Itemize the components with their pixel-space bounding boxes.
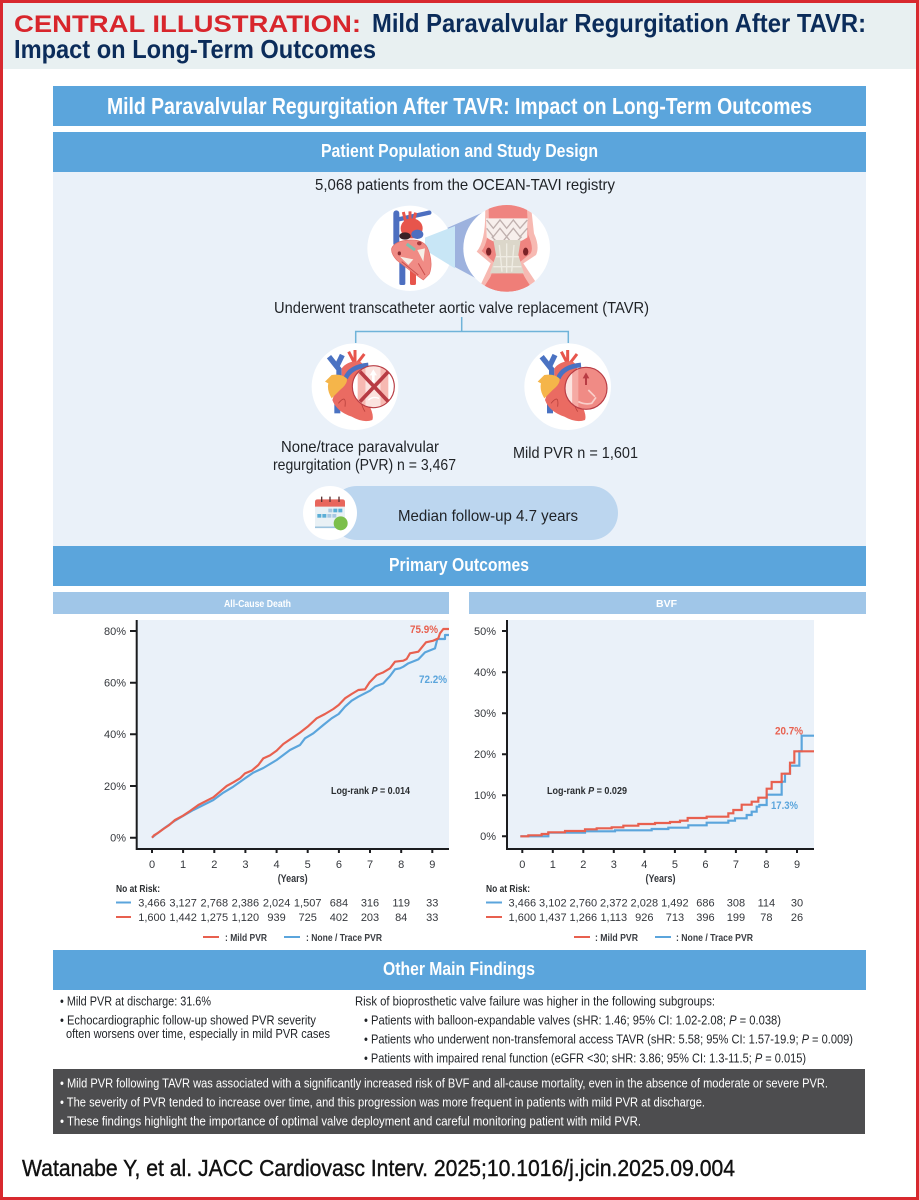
- table: number at risk: 1,437: [539, 912, 567, 924]
- end label: mild PVR: 20.7%: [775, 726, 803, 738]
- table: number at risk: 33: [426, 898, 438, 910]
- legend: [574, 932, 753, 944]
- text block: left findings: • Echocardiographic follow-up showed PVR severity: [60, 1012, 316, 1028]
- table: number at risk: 119: [392, 898, 410, 910]
- text block: right findings: • Patients who underwent non-transfemoral access TAVR (sHR: 5.58; 95% CI: 1.57-19.9; P = 0.009): [364, 1032, 853, 1046]
- end label: none/trace PVR: 72.2%: [419, 674, 447, 686]
- table: number at risk: 1,600: [138, 912, 166, 924]
- x axis labels: 1: [180, 859, 186, 871]
- heading bar: main title: [53, 86, 866, 126]
- heading bar: patient population: [53, 132, 866, 172]
- legend: : Mild PVR: [225, 932, 267, 944]
- heading bar: primary outcomes: [53, 546, 866, 586]
- table: number at risk: 84: [395, 912, 407, 924]
- panel: conclusions: [53, 1069, 865, 1134]
- legend: : None / Trace PVR: [676, 932, 753, 944]
- x axis labels: 6: [336, 859, 342, 871]
- table: number at risk: 2,024: [263, 898, 290, 910]
- x axis labels: 9: [429, 859, 435, 871]
- x axis labels: 2: [211, 859, 217, 871]
- table: number at risk: 3,127: [169, 898, 197, 910]
- x axis labels: 9: [794, 859, 800, 871]
- text block: right findings: • Patients with impaired renal function (eGFR <30; sHR: 3.86; 95% CI: 1.3-11.5; P = 0.015): [364, 1050, 806, 1066]
- citation: Watanabe Y, et al. JACC Cardiovasc Interv. 2025;10.1016/j.jcin.2025.09.004: [22, 1155, 735, 1181]
- table: number at risk: 1,275: [201, 912, 228, 924]
- table: number at risk: 926: [635, 912, 653, 924]
- panel: patient population and study design: [53, 132, 866, 546]
- panel: all-cause death chart: [53, 592, 449, 944]
- table: number at risk: 939: [267, 912, 286, 924]
- sub-heading: BVF: BVF: [656, 598, 678, 610]
- x axis labels: 5: [305, 859, 311, 871]
- table: number at risk: 1,507: [294, 898, 321, 910]
- table: number at risk: No at Risk:: [486, 883, 530, 895]
- text: none/trace PVR group: [273, 439, 456, 474]
- text block: left findings: often worsens over time, especially in mild PVR cases: [66, 1026, 330, 1041]
- x axis labels: 8: [763, 859, 769, 871]
- x axis labels: 2: [580, 859, 586, 871]
- y axis labels: 30%: [474, 708, 496, 720]
- x axis labels: 4: [641, 859, 647, 871]
- x axis labels: 0: [149, 859, 155, 871]
- y axis labels: 20%: [104, 781, 126, 793]
- table: number at risk: 3,102: [539, 898, 567, 910]
- header band: [2, 3, 917, 69]
- heading bar: patient population: Patient Population and Study Design: [321, 141, 598, 161]
- x axis labels: [149, 859, 435, 885]
- sub-heading: all-cause death: [53, 592, 449, 614]
- table: number at risk: 316: [361, 898, 379, 910]
- table: number at risk: 1,113: [600, 912, 627, 924]
- legend: : Mild PVR: [595, 932, 638, 944]
- y axis labels: 80%: [104, 626, 126, 638]
- legend: [203, 932, 382, 944]
- text: none/trace PVR group: regurgitation (PVR) n = 3,467: [273, 457, 456, 474]
- table: number at risk: 1,120: [232, 912, 259, 924]
- table: number at risk: No at Risk:: [116, 883, 160, 895]
- table: number at risk: 3,466: [138, 898, 166, 910]
- y axis labels: 10%: [474, 790, 496, 802]
- table: number at risk: 114: [758, 898, 775, 910]
- heading bar: primary outcomes: Primary Outcomes: [389, 555, 529, 575]
- table: number at risk: [116, 883, 438, 924]
- table: number at risk: 713: [666, 912, 684, 924]
- y axis labels: [474, 626, 496, 843]
- x axis labels: 7: [733, 859, 739, 871]
- x axis labels: (Years): [646, 873, 676, 885]
- table: number at risk: 30: [791, 898, 803, 910]
- table: number at risk: 199: [727, 912, 745, 924]
- y axis labels: 0%: [480, 831, 496, 843]
- x axis labels: (Years): [278, 873, 308, 885]
- y axis labels: 60%: [104, 678, 126, 690]
- callout: median follow-up: [303, 486, 618, 540]
- table: number at risk: 2,386: [232, 898, 259, 910]
- x axis labels: 4: [274, 859, 280, 871]
- icon: heart with magnified TAVR valve: [367, 203, 550, 293]
- table: number at risk: 2,028: [631, 898, 658, 910]
- y axis labels: [104, 626, 126, 844]
- text: mild PVR group: Mild PVR n = 1,601: [513, 445, 638, 462]
- table: number at risk: 2,768: [201, 898, 228, 910]
- text: follow-up: Median follow-up 4.7 years: [398, 508, 578, 525]
- table: number at risk: 684: [330, 898, 348, 910]
- table: number at risk: 33: [426, 912, 438, 924]
- x axis labels: 5: [672, 859, 678, 871]
- y axis labels: 0%: [110, 832, 126, 844]
- title: first line: Mild Paravalvular Regurgitation After TAVR:: [372, 8, 866, 38]
- x axis labels: 3: [611, 859, 617, 871]
- y axis labels: 40%: [474, 667, 496, 679]
- y axis labels: 20%: [474, 749, 496, 761]
- table: number at risk: [486, 883, 803, 924]
- table: number at risk: 1,492: [661, 898, 689, 910]
- x axis labels: 8: [398, 859, 404, 871]
- y axis labels: 50%: [474, 626, 496, 638]
- table: number at risk: 1,442: [169, 912, 197, 924]
- table: number at risk: 396: [696, 912, 715, 924]
- x axis labels: 3: [242, 859, 248, 871]
- line chart: BVF curves: [502, 620, 814, 853]
- table: number at risk: 402: [330, 912, 348, 924]
- table: number at risk: 308: [727, 898, 745, 910]
- y axis labels: 40%: [104, 729, 126, 741]
- x axis labels: 0: [519, 859, 525, 871]
- x axis labels: 6: [702, 859, 708, 871]
- table: number at risk: 725: [299, 912, 317, 924]
- end label: mild PVR: 75.9%: [410, 624, 438, 636]
- legend: : None / Trace PVR: [306, 932, 382, 944]
- text block: left findings: [60, 994, 330, 1041]
- table: number at risk: 78: [760, 912, 773, 924]
- text block: left findings: • Mild PVR at discharge: 31.6%: [60, 994, 211, 1008]
- text: patient count: 5,068 patients from the OCEAN-TAVI registry: [315, 177, 615, 194]
- heading bar: main title: Mild Paravalvular Regurgitation After TAVR: Impact on Long-Term Outcomes: [107, 93, 812, 119]
- panel: conclusions: • These findings highlight the importance of optimal valve deployment and careful monitoring patient with mild PVR.: [60, 1114, 641, 1128]
- panel: BVF chart: [469, 592, 866, 944]
- end label: none/trace PVR: 17.3%: [771, 800, 798, 812]
- panel: conclusions: • The severity of PVR tended to increase over time, and this progression was more frequent in patients with mild PVR at discharge.: [60, 1094, 705, 1110]
- text: none/trace PVR group: None/trace paravalvular: [281, 439, 440, 456]
- x axis labels: 7: [367, 859, 373, 871]
- connector: tree to two groups: [356, 317, 568, 343]
- log-rank annotation: Log-rank P = 0.014: [331, 785, 410, 797]
- heading bar: other main findings: Other Main Findings: [383, 959, 535, 979]
- icon: calendar: [315, 497, 348, 530]
- table: number at risk: 3,466: [509, 898, 536, 910]
- table: number at risk: 2,760: [570, 898, 597, 910]
- table: number at risk: 1,266: [570, 912, 597, 924]
- x axis labels: 1: [550, 859, 556, 871]
- log-rank annotation: Log-rank P = 0.029: [547, 785, 627, 797]
- table: number at risk: 203: [361, 912, 379, 924]
- x axis labels: [519, 859, 800, 885]
- table: number at risk: 1,600: [509, 912, 536, 924]
- title: second line: Impact on Long-Term Outcomes: [14, 34, 376, 64]
- table: number at risk: 2,372: [600, 898, 628, 910]
- heading bar: other main findings: [53, 950, 866, 990]
- text: TAVR label: Underwent transcatheter aortic valve replacement (TAVR): [274, 300, 649, 317]
- table: number at risk: 26: [791, 912, 803, 924]
- icon: heart mild PVR: [524, 343, 611, 430]
- text block: right findings: Risk of bioprosthetic valve failure was higher in the following subgroups:: [355, 994, 715, 1008]
- line chart: all-cause death curves: [130, 620, 449, 853]
- sub-heading: BVF: [469, 592, 866, 614]
- table: number at risk: 686: [696, 898, 715, 910]
- title: central illustration label: CENTRAL ILLUSTRATION:: [14, 11, 361, 38]
- text block: right findings: [355, 994, 853, 1066]
- text block: right findings: • Patients with balloon-expandable valves (sHR: 1.46; 95% CI: 1.02-2.08; P = 0.038): [364, 1012, 781, 1028]
- icon: heart no PVR: [312, 343, 398, 430]
- sub-heading: all-cause death: All-Cause Death: [224, 598, 291, 610]
